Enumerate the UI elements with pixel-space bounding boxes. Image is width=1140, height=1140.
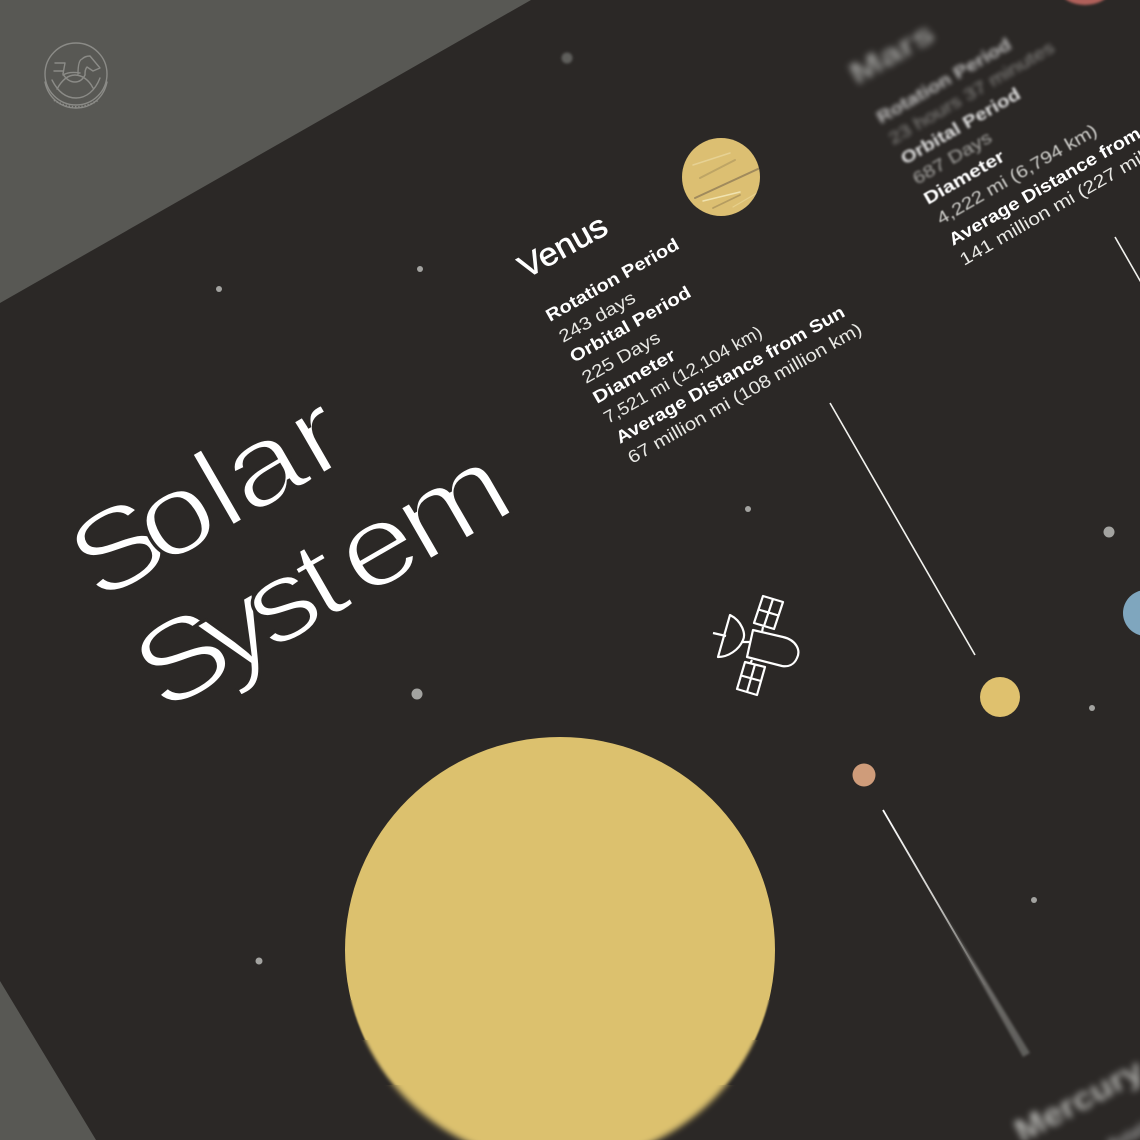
text block: mars: 4,222 mi (6,794 km) [933, 120, 1101, 228]
text block: mars: 687 Days [909, 127, 995, 188]
planet: mars edge [1061, 0, 1109, 5]
text block: mars: Diameter [920, 146, 1008, 208]
text block: venus: 225 Days [578, 327, 664, 387]
title: Solar [47, 367, 366, 625]
planet: sun [345, 737, 775, 1140]
text block: mars: Rotation Period [873, 34, 1015, 127]
background surface bottom left [0, 981, 96, 1140]
text block: venus: Diameter [589, 345, 679, 407]
planet: blue [1123, 590, 1140, 636]
text block: venus [512, 207, 865, 467]
line: venus pointer [830, 403, 975, 655]
text block: venus: 7,521 mi (12,104 km) [600, 322, 766, 427]
text block: mars [844, 16, 1140, 269]
text block: venus: Rotation Period [542, 234, 682, 325]
background surface top left [0, 0, 531, 303]
line: mercury pointer [883, 810, 1030, 1057]
text block: mars: Mars [844, 16, 940, 91]
stars [216, 52, 1114, 964]
planet: venus [682, 138, 760, 216]
title: System [111, 420, 532, 736]
text block: venus: Venus [512, 207, 613, 285]
icon: rocking horse logo [45, 43, 107, 108]
text block: venus: Average Distance from Sun [612, 302, 848, 447]
text block: mars: Orbital Period [897, 84, 1024, 168]
text block: venus: 67 million mi (108 million km) [624, 319, 865, 467]
text block: venus: Orbital Period [566, 282, 694, 366]
text block: mars: 23 hours 37 minutes [885, 37, 1058, 148]
icon: satellite [713, 596, 798, 695]
text block: venus: 243 days [555, 287, 639, 346]
planet: earth-sized yellow dot [980, 677, 1020, 717]
planet: mercury [852, 764, 876, 786]
line: mars pointer [1115, 237, 1140, 291]
